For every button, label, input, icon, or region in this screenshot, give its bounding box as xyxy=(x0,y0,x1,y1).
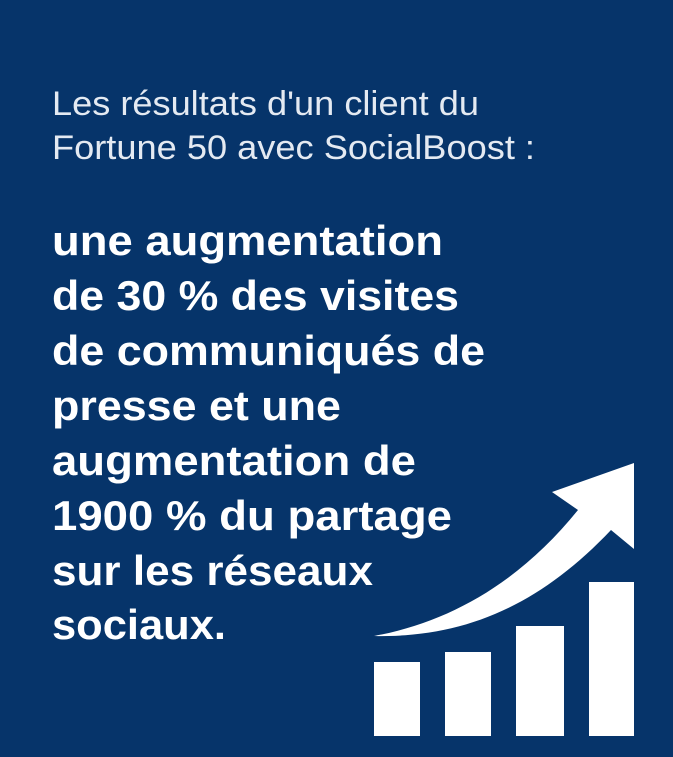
headline result text: de 30 % des visites xyxy=(52,272,459,319)
headline result text: une augmentation xyxy=(52,217,443,264)
bar chart icon xyxy=(374,582,634,736)
headline result text xyxy=(52,217,485,648)
icon: rising arrow xyxy=(374,463,634,636)
headline result text: 1900 % du partage xyxy=(52,492,452,539)
headline result text: presse et une xyxy=(52,382,341,429)
headline result text: de communiqués de xyxy=(52,327,485,374)
headline result text: sociaux. xyxy=(52,601,226,648)
headline result text: sur les réseaux xyxy=(52,547,374,594)
intro text: Les résultats d'un client du xyxy=(52,85,479,123)
intro text xyxy=(52,85,535,167)
intro text: Fortune 50 avec SocialBoost : xyxy=(52,129,535,167)
headline result text: augmentation de xyxy=(52,437,416,484)
